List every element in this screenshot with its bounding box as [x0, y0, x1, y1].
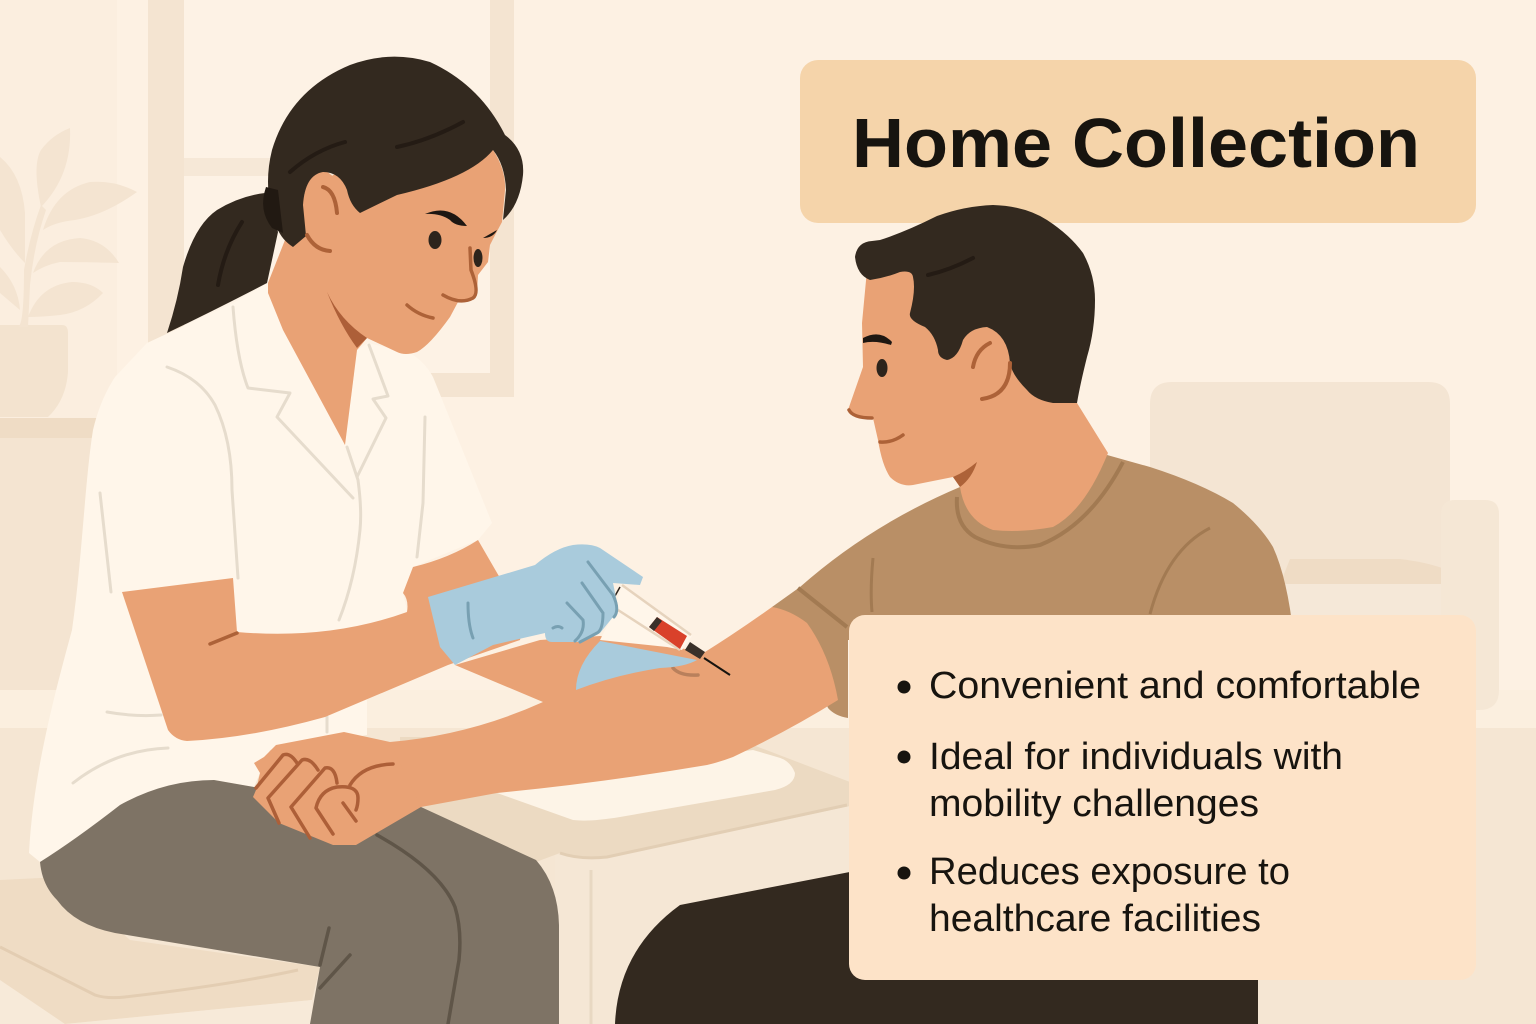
- neck and face: [848, 250, 1108, 531]
- collar: [957, 462, 1123, 547]
- eyes, brows, nose, mouth: [428, 231, 442, 249]
- nurse arm: [122, 540, 530, 741]
- hair: [268, 57, 523, 247]
- uniform: [29, 283, 492, 862]
- bullet: convenient: Convenient and comfortable: [929, 665, 1421, 707]
- patient trousers: [615, 870, 1258, 1024]
- title: Home Collection: [852, 104, 1420, 182]
- bullet: exposure: [898, 851, 1290, 940]
- bullet: mobility: Ideal for individuals with: [929, 736, 1343, 778]
- syringe: [600, 584, 730, 675]
- alcohol pad: [576, 641, 697, 690]
- nurse stool: [0, 877, 320, 1024]
- nurse ear base: [303, 170, 350, 240]
- panel: benefits list: [849, 615, 1476, 980]
- patient shirt: [772, 453, 1294, 718]
- ear lines: [307, 187, 337, 251]
- side table with towel: [400, 737, 850, 1024]
- trousers: [40, 780, 559, 1024]
- hair: [855, 205, 1095, 403]
- nurse hand holding arm: [253, 732, 421, 845]
- title panel: [800, 60, 1476, 223]
- patient arm: [380, 607, 838, 807]
- ear: [973, 343, 1010, 399]
- bullet: exposure: healthcare facilities: [929, 898, 1261, 940]
- patient: [772, 205, 1294, 718]
- nose, mouth, jaw: [849, 410, 903, 442]
- uniform seams: [73, 307, 425, 783]
- ponytail: [167, 193, 278, 333]
- face and neck: [268, 150, 505, 445]
- bullet: exposure: Reduces exposure to: [929, 851, 1290, 893]
- eye and brow: [876, 359, 888, 377]
- nurse: [29, 57, 559, 1024]
- bullet: mobility: [898, 736, 1343, 825]
- plant: [0, 128, 137, 417]
- gloved hand: [428, 544, 643, 665]
- arm crease: [673, 668, 698, 675]
- armchair: [1150, 382, 1499, 710]
- bullet: mobility: mobility challenges: [929, 783, 1259, 825]
